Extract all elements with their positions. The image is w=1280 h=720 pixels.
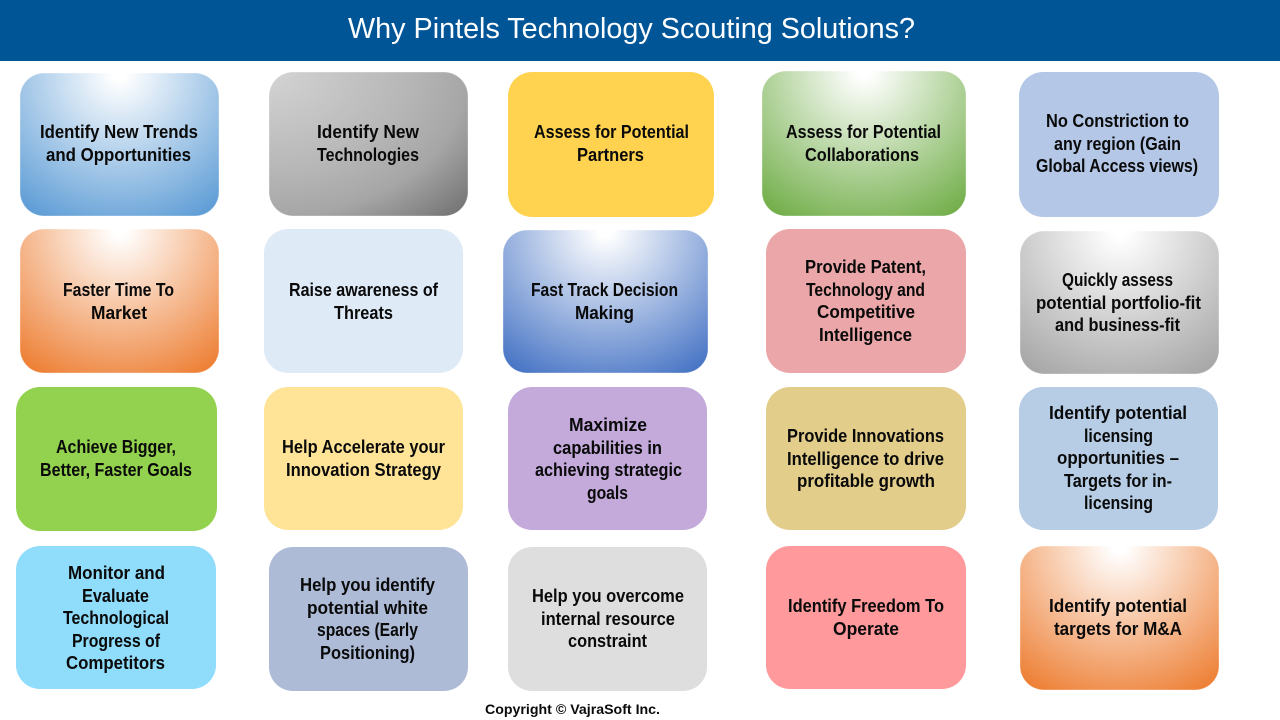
card text bbox=[1049, 403, 1187, 513]
card: Maximize capabilities in achieving strategic goals bbox=[508, 387, 707, 530]
card text: opportunities – bbox=[1057, 448, 1179, 468]
card text: constraint bbox=[568, 631, 647, 651]
title: Why Pintels Technology Scouting Solutions? bbox=[348, 13, 915, 45]
card text: Help you identify bbox=[300, 575, 435, 595]
card text: licensing bbox=[1084, 426, 1153, 446]
card text: Help you overcome bbox=[532, 586, 684, 606]
card text: potential portfolio-fit bbox=[1036, 293, 1201, 313]
card: Quickly assess potential portfolio-fit and business-fit bbox=[1020, 231, 1219, 374]
card text: Intelligence to drive bbox=[787, 449, 944, 469]
card: Raise awareness of Threats bbox=[264, 229, 463, 373]
card text: Technology and bbox=[806, 280, 925, 300]
card text: Better, Faster Goals bbox=[40, 460, 192, 480]
card text bbox=[787, 426, 944, 491]
card: Provide Patent, Technology and Competitive Intelligence bbox=[766, 229, 966, 373]
card text: Identify New bbox=[317, 122, 420, 142]
card text: Help Accelerate your bbox=[282, 437, 445, 457]
card text: Quickly assess bbox=[1062, 270, 1173, 290]
card text bbox=[40, 437, 192, 480]
card text: Fast Track Decision bbox=[531, 280, 678, 300]
card text: achieving strategic bbox=[535, 460, 682, 480]
card text bbox=[40, 122, 198, 165]
card text bbox=[63, 280, 174, 323]
card text: Market bbox=[91, 303, 147, 323]
card text bbox=[1049, 596, 1187, 639]
card text: Faster Time To bbox=[63, 280, 174, 300]
card text: Evaluate bbox=[82, 586, 149, 606]
card text: Progress of bbox=[72, 631, 161, 651]
card: Identify New Technologies bbox=[269, 72, 468, 216]
card text bbox=[289, 280, 439, 323]
card text bbox=[805, 257, 926, 345]
card: Identify potential licensing opportunities bbox=[1019, 387, 1218, 530]
card: Provide Innovations Intelligence to drive profitable growth bbox=[766, 387, 966, 530]
card text: spaces (Early bbox=[317, 620, 418, 640]
card text: Operate bbox=[833, 619, 899, 639]
card text: Identify New Trends bbox=[40, 122, 198, 142]
card: Monitor and Evaluate Technological Progress of Competitors bbox=[16, 546, 216, 689]
card text bbox=[535, 415, 682, 503]
card: Faster Time To Market bbox=[20, 229, 219, 373]
card: No Constriction to any region bbox=[1019, 72, 1219, 217]
card: Fast Track Decision Making bbox=[503, 230, 708, 373]
card text bbox=[63, 563, 169, 673]
card text: internal resource bbox=[541, 609, 675, 629]
card text bbox=[788, 596, 944, 639]
card text: any region (Gain bbox=[1054, 134, 1181, 154]
copyright footer: Copyright © VajraSoft Inc. bbox=[485, 702, 660, 717]
card: Help you overcome internal resource constraint bbox=[508, 547, 707, 691]
card text: Partners bbox=[577, 145, 644, 165]
card text: targets for M&A bbox=[1054, 619, 1182, 639]
card: Help Accelerate your Innovation Strategy bbox=[264, 387, 463, 530]
card text: Targets for in- bbox=[1064, 471, 1172, 491]
card text: Maximize bbox=[569, 415, 647, 435]
card text: goals bbox=[587, 483, 628, 503]
card: Identify potential targets for M&A bbox=[1020, 546, 1219, 690]
card text: Monitor and bbox=[68, 563, 165, 583]
card: Assess for Potential Collaborations bbox=[762, 71, 966, 216]
card text: Raise awareness of bbox=[289, 280, 439, 300]
card text: Identify potential bbox=[1049, 596, 1187, 616]
card text bbox=[532, 586, 684, 651]
card text: Identify Freedom To bbox=[788, 596, 944, 616]
card text: Collaborations bbox=[805, 145, 919, 165]
card: Help you identify potential white spaces bbox=[269, 547, 468, 691]
card text: and business-fit bbox=[1055, 315, 1180, 335]
card text bbox=[531, 280, 678, 323]
card text bbox=[534, 122, 689, 165]
title banner bbox=[0, 0, 1280, 61]
card text: potential white bbox=[307, 598, 428, 618]
card text: Assess for Potential bbox=[786, 122, 941, 142]
card text: Positioning) bbox=[320, 643, 415, 663]
card text bbox=[300, 575, 435, 663]
card text: Assess for Potential bbox=[534, 122, 689, 142]
card text: No Constriction to bbox=[1046, 111, 1189, 131]
card text: Achieve Bigger, bbox=[56, 437, 176, 457]
card text bbox=[1036, 111, 1198, 176]
card text: and Opportunities bbox=[46, 145, 191, 165]
card text: Identify potential bbox=[1049, 403, 1187, 423]
card text bbox=[282, 437, 445, 480]
card text: capabilities in bbox=[553, 438, 662, 458]
card text: profitable growth bbox=[797, 471, 935, 491]
card text: Threats bbox=[334, 303, 393, 323]
card text: Global Access views) bbox=[1036, 156, 1198, 176]
card: Achieve Bigger, Better, Faster Goals bbox=[16, 387, 217, 531]
card text: Provide Patent, bbox=[805, 257, 926, 277]
card: Identify New Trends and Opportunities bbox=[20, 73, 219, 216]
card text: Technologies bbox=[317, 145, 419, 165]
card text bbox=[1036, 270, 1201, 335]
card text: Intelligence bbox=[819, 325, 912, 345]
card text: Making bbox=[575, 303, 634, 323]
card: Identify Freedom To Operate bbox=[766, 546, 966, 689]
card text: Technological bbox=[63, 608, 169, 628]
card: Assess for Potential Partners bbox=[508, 72, 714, 217]
card text: Provide Innovations bbox=[787, 426, 944, 446]
card text: Competitors bbox=[66, 653, 165, 673]
card text: licensing bbox=[1084, 493, 1153, 513]
card text bbox=[317, 122, 420, 165]
card text: Competitive bbox=[817, 302, 915, 322]
card text: Innovation Strategy bbox=[286, 460, 441, 480]
card text bbox=[786, 122, 941, 165]
